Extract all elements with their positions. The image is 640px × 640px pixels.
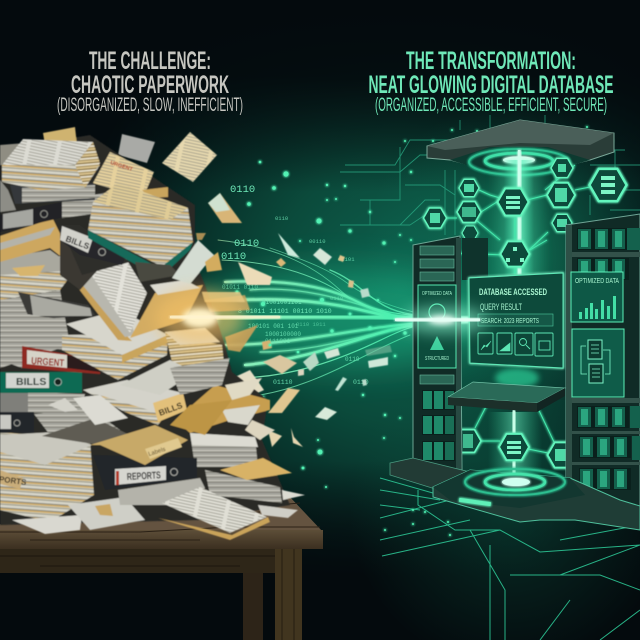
- title: the transformation: [368, 47, 614, 116]
- right panel: optimized data chart: [571, 272, 623, 322]
- binary numbers: 01110: [273, 379, 293, 386]
- central beam: [488, 150, 550, 482]
- binary numbers: 0110: [221, 251, 246, 263]
- paper pile: URGENT: [31, 356, 64, 369]
- table: [0, 497, 323, 640]
- title: the challenge: THE CHALLENGE:: [89, 47, 211, 75]
- rack modules: [577, 228, 640, 490]
- urgent letter: [93, 152, 154, 198]
- center stack: [62, 333, 168, 380]
- center panel: query result: SEARCH: 2023 REPORTS: [481, 316, 539, 325]
- mid binders: [0, 392, 28, 412]
- open folder: [72, 275, 132, 341]
- binary numbers: 8 01011 11101 00110 1010: [238, 308, 332, 315]
- binary numbers: 0110: [345, 356, 360, 363]
- right server rack: [566, 214, 640, 510]
- binary numbers: 0111001: [265, 338, 291, 345]
- right panel: documents sync: [572, 329, 624, 397]
- title: the challenge: (DISORGANIZED, SLOW, INEFFICIENT): [57, 95, 243, 116]
- binary numbers: 1000100000: [265, 331, 301, 338]
- center panel: query result: [469, 273, 563, 368]
- left panel: optimized data: [418, 285, 456, 368]
- top left stack: [43, 127, 77, 145]
- title: the challenge: [57, 47, 243, 116]
- paper pile: REPORTS: [127, 470, 161, 483]
- green bills binder: [0, 372, 82, 393]
- flying papers: [118, 132, 392, 447]
- red urgent binder: [22, 346, 100, 374]
- database cap: top ring: [427, 120, 614, 175]
- floor circuit: [380, 478, 640, 640]
- center panel: query result: QUERY RESULT: [480, 302, 522, 312]
- binary numbers: 0110: [230, 184, 255, 196]
- right panel: optimized data chart: OPTIMIZED DATA: [575, 278, 619, 285]
- paper pile: BILLS: [16, 376, 46, 388]
- front document: [158, 517, 270, 540]
- data stream: [205, 240, 480, 395]
- top binders: [0, 193, 105, 232]
- query icons: [478, 333, 553, 356]
- binary numbers: 01011 0110: [222, 284, 258, 291]
- center panel: query result: DATABASE ACCESSED: [479, 287, 547, 298]
- rack top units: [420, 246, 454, 384]
- right lower stacks: [190, 433, 258, 467]
- gray form and flyers near stack: [135, 262, 180, 282]
- keyboard console: [448, 368, 565, 412]
- left server rack: [390, 236, 488, 492]
- pile shadow backing: [0, 135, 290, 525]
- data stream endpoint glow: [395, 308, 487, 332]
- left panel: optimized data: OPTIMIZED DATA: [422, 291, 452, 297]
- stream glow: [180, 270, 500, 366]
- base platform: [433, 469, 640, 530]
- binary numbers: 0110: [353, 379, 369, 386]
- paper pile: [0, 127, 305, 540]
- paper pile: Labels: [148, 447, 166, 458]
- left folder and binders: [60, 235, 105, 290]
- title: the challenge: CHAOTIC PAPERWORK: [71, 71, 229, 99]
- hexagon glyphs: [430, 164, 615, 461]
- paper glow burst: [155, 290, 280, 346]
- binary numbers: 0110 1011: [296, 321, 326, 328]
- bills stack: [83, 380, 183, 425]
- binary numbers: 01101: [338, 256, 355, 263]
- paper pile: URGENT: [109, 160, 134, 173]
- paper pile: BILLS: [64, 233, 91, 251]
- left panel: optimized data: STRUCTURED: [425, 356, 449, 362]
- binary numbers: 0110: [330, 295, 343, 302]
- binary numbers: 51001001101: [262, 299, 302, 306]
- particles: [236, 161, 432, 488]
- paper pile: BILLS: [157, 400, 184, 418]
- right upper stack: [142, 187, 168, 198]
- circuit lines background: [340, 115, 640, 235]
- binary numbers: [221, 184, 369, 386]
- binary numbers: 0110: [234, 238, 259, 250]
- binary numbers: 00110: [309, 238, 326, 245]
- top particles: [404, 126, 613, 241]
- hexagon network lines: [446, 160, 590, 453]
- rack lower modules: [422, 390, 455, 461]
- hexagon icons: [424, 158, 626, 468]
- binary numbers: 0110: [275, 215, 288, 222]
- base stacks: [0, 432, 94, 522]
- reports binder: [93, 455, 197, 490]
- binary numbers: 100101 001 101: [248, 323, 299, 330]
- floor particles: [384, 509, 451, 536]
